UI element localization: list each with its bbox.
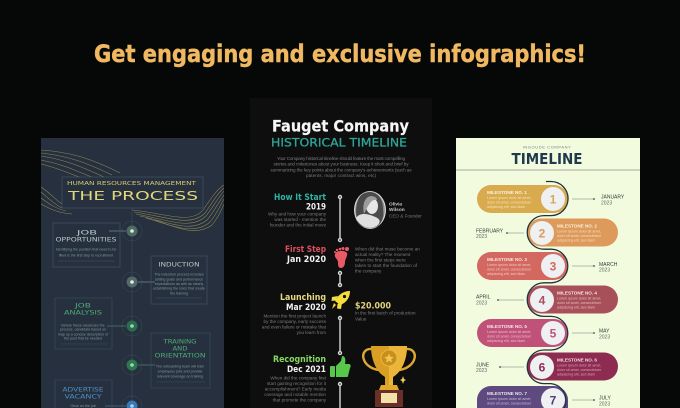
heading box: HUMAN RESOURCES MANAGEMENT: [67, 181, 197, 187]
card: training and orientation: relevant coverage on training: [157, 374, 203, 378]
heading box: [62, 177, 203, 208]
card: job opportunities: filled is the first step to recruitment: [59, 253, 113, 257]
milestone 3: 3: [550, 260, 557, 274]
milestone: first step: First Step: [285, 245, 326, 255]
milestone 7: dolor sit amet, consectetuer: [487, 402, 532, 406]
intro paragraph: Your Company historical timeline should feature the most compelling: [277, 156, 405, 161]
milestone 3: adipiscing elit, sed diam: [487, 272, 525, 276]
milestone 6: MILESTONE NO. 6: [557, 358, 597, 362]
heading: Fauget Company: [272, 116, 410, 136]
panel: HR process infographic: [41, 138, 224, 408]
funding figure: $20.000: [355, 302, 391, 312]
intro paragraph: summarizing the key points about the company's achievements (such as: [270, 167, 412, 172]
milestone 7: MILESTONE NO. 7: [487, 391, 527, 396]
milestone 5: [477, 319, 568, 347]
node 1: [109, 221, 142, 241]
title: Get engaging and exclusive infographics!: [94, 40, 586, 68]
date: July: 2023: [599, 402, 610, 408]
milestone 4: MILESTONE NO. 4: [557, 290, 597, 296]
milestone 3: MILESTONE NO. 3: [487, 257, 527, 262]
milestone 1: dolor sit amet, consectetuer: [487, 200, 532, 204]
person caption: CEO & Founder: [389, 214, 422, 218]
milestone: recognition: that promote the company: [273, 398, 327, 402]
wave decoration: [41, 150, 224, 231]
milestone 5: adipiscing elit, sed diam: [487, 339, 525, 343]
milestone 6: [527, 352, 618, 380]
milestone: recognition: accomplishment? Early media: [265, 386, 326, 392]
milestone 1: MILESTONE NO. 1: [487, 190, 527, 195]
milestone 3: dolor sit amet, consectetuer: [487, 268, 532, 272]
milestone 7: 7: [550, 394, 557, 408]
node 3: [107, 316, 142, 336]
card: induction: expectations as well as clearly: [155, 282, 203, 286]
timeline spine: [131, 208, 133, 408]
date: May: MAY: [599, 328, 610, 334]
milestone: recognition: [264, 355, 327, 402]
date: March: [572, 262, 618, 274]
milestone 4: [527, 286, 618, 314]
card: job analysis: the post that be needed: [64, 336, 102, 340]
milestone 6: Lorem ipsum dolor sit amet,: [557, 364, 601, 368]
milestone: launching: Mar 2020: [286, 303, 326, 313]
card: advertise vacancy: VACANCY: [64, 393, 102, 400]
card: training and orientation: The onboarding team will train: [156, 364, 204, 368]
milestone: launching: [262, 293, 327, 335]
card: job opportunities: [53, 223, 120, 267]
first step text: actual reality? The moment: [355, 252, 411, 257]
card: training and orientation: TRAINING: [162, 338, 197, 345]
card: training and orientation: employees jobs and provide: [158, 369, 202, 373]
milestone 5: dolor sit amet, consectetuer: [487, 334, 532, 338]
card: job analysis: [55, 298, 112, 349]
milestone: recognition: Dec 2021: [287, 365, 326, 375]
milestone 3: Lorem ipsum dolor sit amet,: [487, 263, 531, 267]
date: May: 2023: [599, 334, 610, 340]
card: advertise vacancy: ADVERTISE: [62, 386, 104, 393]
card: job analysis: Before these vacancies the: [61, 323, 105, 327]
card: induction: establishing the roles that create: [153, 286, 205, 290]
timeline segments: [338, 196, 342, 408]
milestone 4: Lorem ipsum dolor sit amet,: [557, 296, 601, 300]
card: job analysis: JOB: [74, 302, 91, 309]
date: January: 2023: [601, 200, 612, 206]
milestone 2: Lorem ipsum dolor sit amet,: [557, 230, 601, 234]
intro paragraph: stories and milestones about your business. Keep it short and brief by: [274, 162, 409, 167]
node 5: [105, 396, 142, 408]
milestone: first step: [285, 245, 326, 265]
milestone 7: [477, 386, 568, 408]
milestone: recognition: When did the company first: [270, 376, 327, 380]
milestone: how it start: founder and the initial move: [270, 222, 326, 228]
date: April: APRIL: [476, 294, 491, 300]
milestone 6: adipiscing elit, sed diam: [557, 372, 595, 376]
card: job opportunities: JOB: [75, 229, 97, 236]
milestone 2: MILESTONE NO. 2: [557, 224, 597, 228]
card: induction: INDUCTION: [158, 261, 200, 268]
heading: TIMELINE: [512, 150, 582, 168]
milestone: how it start: How It Start: [274, 193, 326, 203]
card: advertise vacancy: [55, 380, 112, 408]
icon: footprint: [334, 247, 349, 268]
date: July: [572, 396, 612, 408]
milestone 4: dolor sit amet, consectetuer: [557, 301, 602, 305]
milestone: launching: and even failure or mistake that: [262, 324, 327, 330]
heading: HISTORICAL TIMELINE: [271, 136, 407, 150]
milestone 7: Lorem ipsum dolor sit amet,: [487, 397, 531, 401]
first step text: the company: [355, 268, 382, 274]
milestone 5: 5: [550, 326, 557, 340]
card: induction: the training: [170, 291, 188, 295]
date: June: 2023: [476, 368, 487, 374]
card: induction: setting goals and performance: [155, 277, 203, 281]
person caption: Olivia: [389, 202, 402, 208]
milestone 2: adipiscing elit, sed diam: [557, 238, 595, 242]
node 2: [122, 272, 155, 292]
milestone: how it start: [268, 193, 327, 228]
milestone: recognition: start gaining recognition for it: [267, 381, 327, 386]
icon: rocket: [332, 291, 350, 309]
milestone: how it start: was started - mention the: [274, 217, 326, 222]
panel: milestone timeline: [456, 138, 640, 408]
icon: trophy: [363, 346, 415, 407]
milestone: recognition: Recognition: [273, 355, 326, 365]
heading: [271, 116, 410, 150]
milestone 2: 2: [539, 226, 546, 240]
panel: historical timeline: [250, 98, 432, 408]
card: induction: The induction process includes: [154, 272, 204, 276]
milestone 5: Lorem ipsum dolor sit amet,: [487, 330, 531, 334]
milestone: launching: you learn from: [297, 330, 326, 335]
milestone 1: adipiscing elit, sed diam: [487, 205, 525, 209]
date: July: JULY: [599, 396, 612, 402]
milestone 4: adipiscing elit, sed diam: [557, 306, 595, 310]
milestone 2: dolor sit amet, consectetuer: [557, 234, 602, 238]
date: January: [572, 194, 625, 206]
card: advertise vacancy: Once on the job: [70, 404, 96, 408]
first step text: taken to start the foundation of: [355, 263, 418, 268]
heading: INGOUDE COMPANY: [523, 144, 571, 150]
milestone 1: 1: [550, 192, 557, 206]
intro paragraph: [270, 156, 412, 178]
milestone 1: Lorem ipsum dolor sit amet,: [487, 196, 531, 200]
date: May: [572, 328, 610, 340]
date: March: 2023: [599, 268, 610, 274]
card: training and orientation: [151, 333, 210, 388]
date: June: JUNE: [476, 362, 490, 368]
milestone 3: [477, 252, 568, 280]
milestone 4: 4: [539, 294, 546, 308]
node 4: [122, 355, 155, 375]
card: training and orientation: AND: [172, 345, 188, 352]
person caption: Wilson: [389, 207, 405, 213]
card: job opportunities: OPPORTUNITIES: [56, 236, 117, 244]
milestone 5: MILESTONE NO. 5: [487, 324, 527, 329]
person caption: [389, 202, 422, 218]
intro paragraph: patents, major contract wins, etc): [306, 173, 376, 178]
milestone: launching: by the company, early success: [264, 319, 327, 324]
card: training and orientation: ORIENTATION: [154, 352, 206, 359]
first step text: When did that muse become an: [355, 246, 420, 252]
milestone: recognition: coverage and notable mention: [264, 392, 326, 397]
card: job opportunities: Identifying the position that need to be: [56, 247, 116, 251]
first step text: [355, 246, 420, 274]
card: job analysis: ANALYSIS: [64, 309, 102, 316]
milestone 2: [527, 218, 618, 246]
portrait: [354, 191, 386, 229]
date: February: [476, 228, 524, 240]
milestone: how it start: Why and how your company: [268, 212, 327, 216]
first step text: when the first steps were: [355, 258, 406, 262]
date: June: [476, 362, 524, 374]
heading box: THE PROCESS: [67, 188, 198, 203]
milestone: launching: Launching: [280, 293, 326, 303]
funding figure: [355, 302, 416, 322]
date: April: [476, 294, 524, 306]
milestone 1: [477, 185, 568, 213]
milestone 6: dolor sit amet, consectetuer: [557, 368, 602, 372]
card: job analysis: process, candidate based on: [60, 327, 106, 331]
funding figure: In the first batch of production: [355, 310, 416, 316]
card: induction: [151, 256, 207, 304]
milestone: first step: Jan 2020: [286, 255, 326, 265]
date: March: MARCH: [599, 262, 618, 268]
winding line: [527, 182, 568, 408]
date: April: 2023: [476, 300, 487, 306]
milestone 6: 6: [539, 360, 546, 374]
date: January: JANUARY: [601, 194, 625, 200]
icon: thumbs up: [330, 356, 351, 377]
card: job analysis: map up a concise description of: [58, 332, 108, 336]
milestone: launching: Mention the first project launch: [263, 314, 326, 318]
date: February: 2023: [476, 234, 487, 240]
date: February: FEBRUARY: [476, 228, 504, 234]
milestone: how it start: 2019: [306, 202, 326, 212]
funding figure: Value: [355, 316, 367, 322]
